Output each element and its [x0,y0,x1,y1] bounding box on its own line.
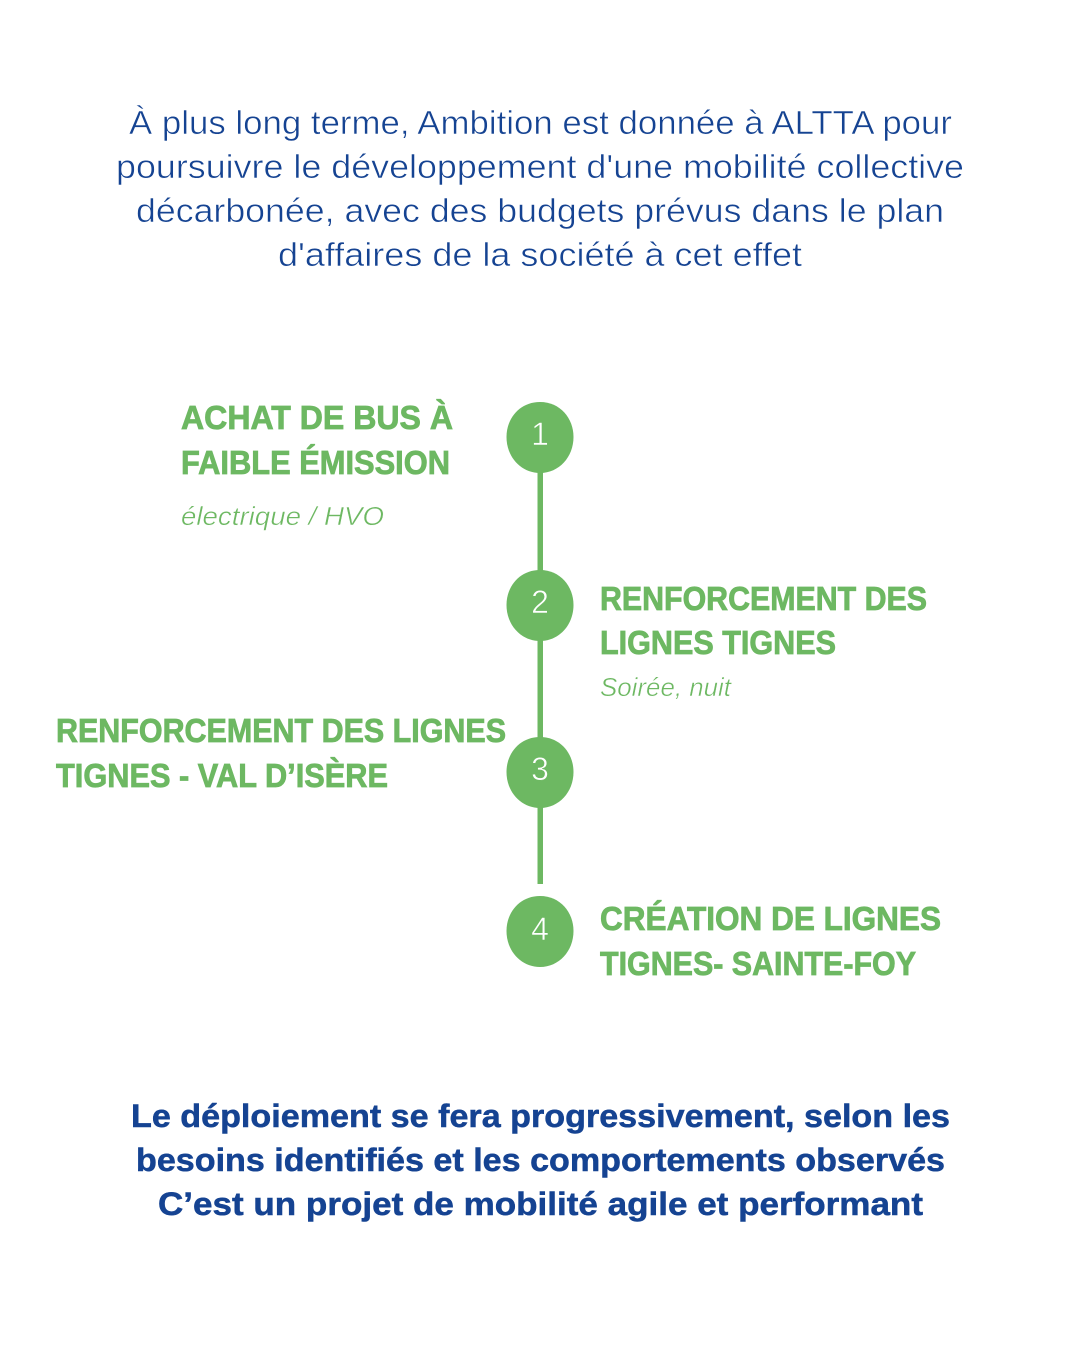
step 2 label [600,580,927,702]
conclusion text block [131,1098,950,1222]
step 3 label [56,712,506,794]
step 2 marker [506,570,574,641]
step 2 label: LIGNES TIGNES [600,624,836,661]
step 1 label: électrique / HVO [181,501,384,531]
step 2 label: Soirée, nuit [600,672,733,702]
step 1 marker: 1 [531,416,549,452]
step 4 label: CRÉATION DE LIGNES [600,900,941,937]
step 1 label: ACHAT DE BUS À [181,399,453,436]
step 4 label [600,900,941,982]
intro text block: À plus long terme, Ambition est donnée à ALTTA pour [129,104,952,141]
conclusion text block: besoins identifiés et les comportements observés [136,1142,945,1178]
intro text block: d'affaires de la société à cet effet [278,236,802,273]
step 4 label: TIGNES- SAINTE-FOY [600,945,916,982]
intro text block: décarbonée, avec des budgets prévus dans le plan [136,192,944,229]
intro text block [116,104,964,273]
step 3 marker: 3 [531,751,549,787]
step 4 marker: 4 [531,911,549,947]
timeline [506,402,574,967]
intro text block: poursuivre le développement d'une mobilité collective [116,148,964,185]
timeline vertical line [538,460,543,884]
conclusion text block: C’est un projet de mobilité agile et performant [158,1186,923,1222]
step 3 marker [506,737,574,808]
step 3 label: TIGNES - VAL D’ISÈRE [56,757,388,794]
step 2 marker: 2 [531,584,549,620]
step 2 label: RENFORCEMENT DES [600,580,927,617]
step 3 label: RENFORCEMENT DES LIGNES [56,712,506,749]
step 4 marker [506,896,574,967]
step 1 label [181,399,453,531]
conclusion text block: Le déploiement se fera progressivement, selon les [131,1098,950,1134]
step 1 marker [506,402,574,473]
step 1 label: FAIBLE ÉMISSION [181,444,450,481]
